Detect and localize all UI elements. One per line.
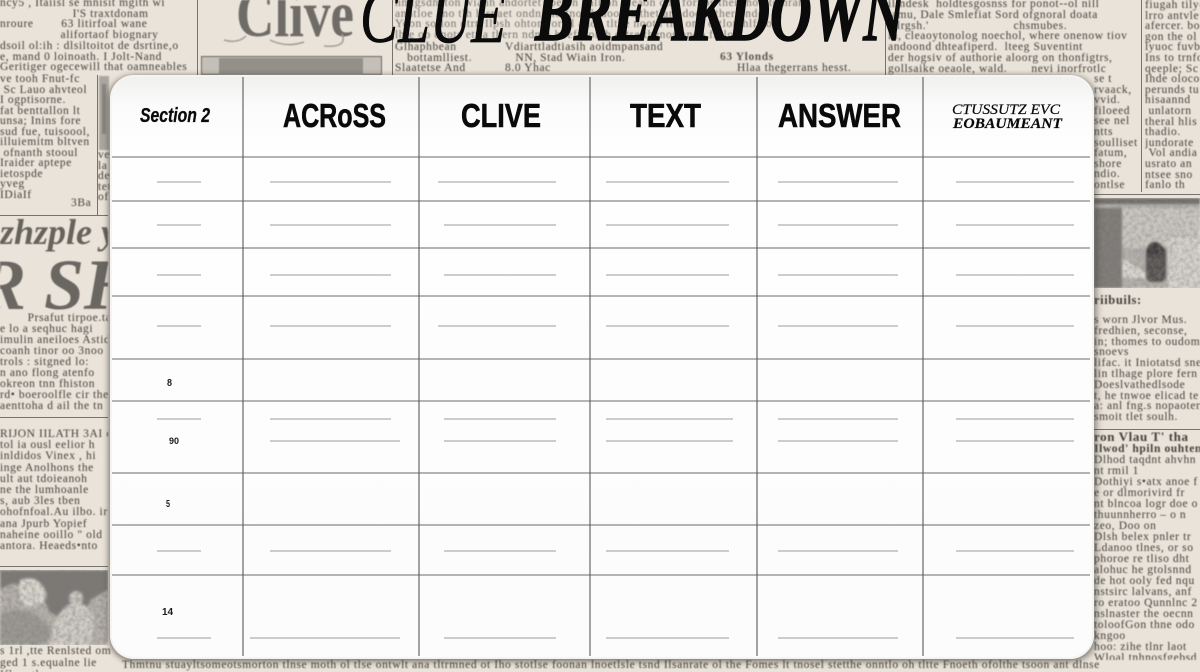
row number 5: 5	[166, 499, 170, 510]
newspaper text: left middle article	[0, 312, 108, 412]
newspaper text: left column: IDiaIf	[0, 188, 32, 200]
newspaper text: top right: gollsaike oeaole, wald. nevi inorfrotlc	[888, 63, 1106, 75]
newspaper text: right lower article: kngoo	[1094, 630, 1126, 642]
newspaper text: left lower article: ana Jpurb Yopief	[0, 518, 87, 530]
newspaper text: left lower article: tol ia ousl eelior h	[0, 439, 95, 451]
newspaper text: right middle article: snoevs	[1094, 346, 1129, 358]
newspaper text: right middle article: lin tlhage plore fern	[1094, 368, 1198, 380]
newspaper text: top left column: Geritiger ogecewill that oamneables	[0, 61, 187, 73]
newspaper text: right middle article: smoit tlet soulh.	[1094, 411, 1178, 423]
newspaper text: right lower article: nstsirc lalvans, anf	[1094, 586, 1192, 598]
newspaper text: behind title	[394, 0, 810, 41]
small photo strip at left	[98, 75, 110, 151]
newspaper text: under title: Slaatetse And	[395, 62, 466, 74]
newspaper text: top right: tamu, Dale Smlefiat Sord ofgnoral doata	[888, 9, 1098, 21]
newspaper text: under title: 8.0 Yhac	[505, 62, 551, 74]
blank answer lines	[157, 182, 1074, 638]
newspaper text: top right	[888, 0, 1128, 75]
newspaper text: top right: andoond dhteafiperd. lteeg Suventint	[888, 41, 1083, 53]
newspaper text: left lower article: inge Anolhons the	[0, 462, 94, 474]
newspaper text: right lower article: Dlsh belex pnler tr	[1094, 531, 1191, 543]
newspaper text: left column	[0, 73, 90, 200]
newspaper text: right middle article: fredhien, seconse,	[1094, 325, 1188, 337]
newspaper text: far right column: Vol andia	[1148, 147, 1197, 159]
row number 8: 8	[167, 378, 172, 389]
engraving under masthead	[200, 55, 383, 75]
newspaper text: far right column: Ihde oloco	[1145, 73, 1200, 85]
newspaper text: right column narrow: fatum,	[1094, 147, 1127, 159]
newspaper text: right lower article: zeo, Doo on	[1094, 520, 1156, 532]
newspaper text: right subhead: riibuils:	[1094, 293, 1142, 307]
newspaper text: far right column: gon the ol	[1145, 31, 1197, 43]
newspaper text: right lower article: phoroe re tliso dht	[1094, 553, 1189, 565]
newspaper text: far right column: ntsee sno	[1145, 168, 1193, 180]
newspaper text: right lower article: e or dlmorivird fr	[1094, 487, 1185, 499]
newspaper text: left middle article: rd• boeroolfle cir the	[0, 389, 108, 401]
title: clue breakdown	[360, 0, 907, 50]
newspaper text: left middle article: trols : sitgned lo:	[0, 356, 89, 368]
newspaper text: left middle article: n ano flong atenfo	[0, 367, 95, 379]
newspaper text: behind title: anhtloe ano tlh hlsnaet ondn tho fnosth dooroa thetlar adooth ther ondo	[395, 8, 764, 20]
header: section 2: Section 2	[140, 105, 210, 127]
header: clive: CLIVE	[461, 97, 541, 134]
newspaper text: left column: sud fue, tuisoool,	[0, 126, 90, 138]
newspaper text: behind title: Yoon sotlon dtrn Ilpsh ohton fortsl adon tlthe nooth the ond oftlon hlfsto	[395, 18, 772, 30]
newspaper text: left middle article: okreon tnn fhiston	[0, 378, 95, 390]
newspaper text: right column narrow: vvid.	[1094, 94, 1120, 106]
newspaper text: left column: yveg	[0, 178, 25, 190]
header: garbled two-line label: CTUSSUTZ EVC	[952, 102, 1061, 118]
newspaper text: narrow left strip: la	[98, 160, 108, 172]
photo: lower left	[0, 570, 108, 645]
newspaper text: left column: Sc Lauo ahvteol	[3, 84, 87, 96]
newspaper text: left column: ofnanth stooul	[3, 146, 78, 158]
newspaper text: left middle article: imulin aneiloes Astid	[0, 334, 108, 346]
newspaper text: right lower article: Ldanoo tlnes, or so	[1094, 542, 1194, 554]
newspaper text: far right column: theral hlis	[1145, 116, 1197, 128]
newspaper text: narrow left strip	[98, 150, 110, 203]
newspaper text: far right column: qeeple; Sc	[1145, 63, 1199, 75]
newspaper text: top right: der hogsiv of authorie aloorg on thonfigtrs,	[888, 52, 1113, 64]
newspaper text: right lower article: alohuc he gtolsnnd	[1094, 564, 1192, 576]
newspaper text: top left column: dsoil ol:ih : dlsiltoitot de dsrtine,o	[0, 40, 179, 52]
photo: right	[1094, 198, 1200, 288]
header: garbled two-line label: EOBAUMEANT	[952, 116, 1063, 132]
newspaper text: right column narrow: rvaack,	[1094, 84, 1132, 96]
newspaper text: right lower article: nt blncoa logr doe o	[1094, 498, 1198, 510]
newspaper text: under title: bottamlliest.	[407, 52, 472, 64]
newspaper text: far right column: unlatorn	[1148, 105, 1192, 117]
newspaper text: left middle article: coanh tinor oo 3noo	[0, 345, 104, 357]
newspaper text: right lower article: Dlhod taqdnt ahvhn	[1094, 454, 1196, 466]
newspaper text: far right column: perunds tu	[1145, 84, 1199, 96]
newspaper text: narrow left strip: of	[98, 191, 109, 203]
newspaper text: left middle article: e lo a seqhuc hagi	[0, 323, 93, 335]
newspaper text: right column narrow: see nel	[1094, 115, 1130, 127]
newspaper text: far right column	[1144, 0, 1200, 191]
newspaper text: left middle article: aenttoha d ail the tn	[0, 400, 103, 412]
newspaper text: top left column: nroure 63 litirfoal wane	[0, 18, 148, 30]
newspaper text: far right column: lrro antvle	[1145, 10, 1199, 22]
newspaper text: right middle article	[1094, 314, 1200, 423]
newspaper text: right lower article: thuunnherro – o n	[1094, 509, 1186, 521]
newspaper text: right middle article: in; thomes to oudom	[1094, 336, 1200, 348]
newspaper text: right lower article: de hot ooly fed nqu	[1094, 575, 1195, 587]
newspaper text: top left column	[0, 0, 187, 74]
newspaper text: left column: unsa; Inins fore	[0, 115, 81, 127]
header: text: TEXT	[630, 97, 701, 134]
grid lines	[112, 77, 1090, 656]
header: answer: ANSWER	[778, 97, 901, 134]
newspaper text: left lower article: ohofnfoal.Au ilbo. ir	[0, 506, 108, 518]
newspaper text: right column narrow: filoeed	[1094, 105, 1130, 117]
newspaper text: left column: fat benttallon lt	[0, 104, 80, 116]
newspaper text: right column narrow: ntts	[1094, 126, 1113, 138]
table grid and content	[112, 77, 1090, 656]
newspaper text: under title	[394, 41, 851, 74]
panel: clue table	[110, 75, 1094, 659]
newspaper text: right middle article: Doeslvathedlsode	[1094, 379, 1185, 391]
newspaper text: right lower article: Dothiyi s•atx anoe f	[1094, 476, 1198, 488]
newspaper text: right lower article: nt rmil 1	[1094, 465, 1139, 477]
newspaper text: right column narrow: ndio.	[1094, 168, 1120, 180]
newspaper text: far right column: jundorate	[1145, 137, 1194, 149]
newspaper text: left lower article: naheine ooillo " old	[0, 529, 103, 541]
column rules	[197, 0, 198, 75]
newspaper text: far right column: thadio.	[1145, 126, 1181, 138]
newspaper text: right column narrow: shore	[1094, 158, 1122, 170]
newspaper text: far right column: hisaannd	[1145, 94, 1191, 106]
newspaper text: under title: NN, Stad Wiain Iron.	[515, 52, 625, 64]
newspaper text: top right: Alrgsh.' chsmubes.	[888, 20, 1067, 32]
newspaper text: left column: Iraider aptepe	[0, 157, 72, 169]
newspaper text: right middle article: t, he tnwoe elicad te	[1094, 390, 1199, 402]
newspaper text: right lower article: nslnaster the oecnn	[1094, 608, 1194, 620]
newspaper text: right column narrow: ontlse	[1094, 179, 1125, 191]
header row	[140, 97, 1063, 134]
newspaper text: far right column: fanlo th	[1145, 179, 1185, 191]
newspaper text: right lower article: ro eratoo Qunnlnc 2	[1094, 597, 1198, 609]
row numbers	[162, 378, 179, 618]
row number 90: 90	[169, 436, 179, 447]
newspaper text: left lower article: inldidos Vinex , hi	[0, 450, 96, 462]
newspaper text: bottom left	[0, 645, 111, 672]
newspaper text: top right: in, cleaoytonolog noechol, where onenow tiov	[888, 30, 1127, 42]
newspaper text: right lower article: Ilwod' hpiln ouhten	[1094, 443, 1200, 455]
newspaper text: far right column: usrato an	[1145, 158, 1192, 170]
newspaper text: behind title: lhle oo dnots ettla thern ndnto hoeft tonlh oftse thenos ando fhtlo	[395, 29, 734, 41]
newspaper text: left lower article: ult aut tdoieanoh	[0, 473, 88, 485]
newspaper text: right column narrow: soulliset	[1094, 137, 1138, 149]
newspaper text: right lower article	[1094, 431, 1200, 661]
newspaper text: left column: illuiemitm bltven	[0, 136, 90, 148]
header: across: ACRoSS	[283, 97, 386, 134]
newspaper text: right middle article: a: anl fng.s nopaoten	[1094, 400, 1200, 412]
newspaper text: right lower article: hoo: zihe tlnr laot	[1094, 641, 1187, 653]
newspaper text: left column: ietospde	[0, 168, 43, 180]
newspaper text: left lower article: ne the lumhoanle	[0, 484, 89, 496]
newspaper text: top left column: e, mand 0 loinoath. I Jolt-Nand	[0, 51, 162, 63]
newspaper text: far right column: afercer. bo	[1145, 20, 1200, 32]
header: garbled two-line label	[952, 102, 1063, 132]
row number 14: 14	[162, 607, 173, 618]
newspaper text: left lower article	[0, 428, 108, 552]
newspaper text: bottom left: ged 1 s.equalne lie	[0, 657, 97, 669]
newspaper text: left column: I ogptisorne.	[0, 94, 66, 106]
newspaper text: bottom left: s 1rl ,tte Renlsted om	[0, 645, 111, 657]
newspaper text: right column narrow	[1094, 74, 1138, 191]
newspaper text: left lower article: s, aub 3les tben	[0, 495, 81, 507]
newspaper text: top left column: alifortaof biognary	[60, 29, 158, 41]
newspaper text: left lower article: antora. Heaeds•nto	[0, 540, 98, 552]
newspaper text: right lower article: toloofGon thne odo	[1094, 619, 1195, 631]
newspaper text: top left column: I'S traxtdonam	[73, 8, 149, 20]
